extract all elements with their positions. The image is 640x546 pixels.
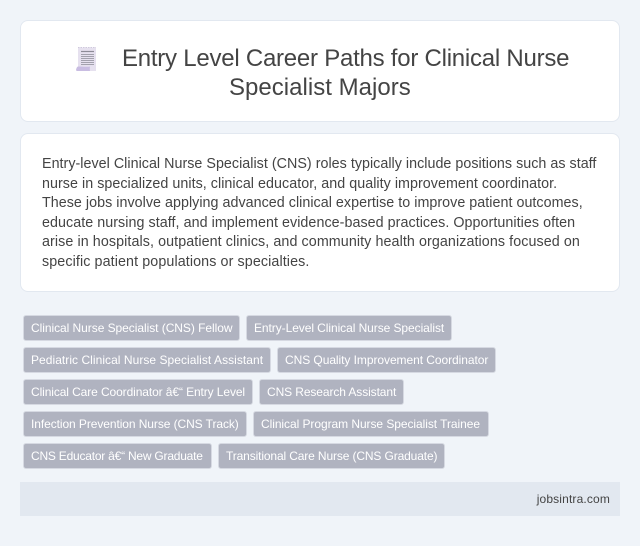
panel: description	[20, 133, 620, 292]
tag	[277, 347, 496, 373]
tag: Clinical Care Coordinator â€“ Entry Level	[31, 385, 245, 399]
description text: arise in hospitals, outpatient clinics, and community health organizations focused on	[42, 234, 580, 250]
tag: Pediatric Clinical Nurse Specialist Assistant	[31, 353, 263, 367]
tag: CNS Research Assistant	[267, 385, 396, 399]
description text: These jobs involve applying advanced clinical expertise to improve patient outcomes,	[42, 195, 583, 211]
title: Entry Level Career Paths for Clinical Nurse	[122, 45, 569, 72]
panel: job title tags	[23, 315, 496, 469]
tag	[23, 315, 240, 341]
footer source text: jobsintra.com	[537, 492, 610, 506]
tag: Clinical Program Nurse Specialist Trainee	[261, 417, 480, 431]
tag	[246, 315, 452, 341]
title: Specialist Majors	[229, 74, 411, 101]
tag: CNS Educator â€“ New Graduate	[31, 449, 203, 463]
description text: Entry-level Clinical Nurse Specialist (CNS) roles typically include positions such as staff	[42, 156, 596, 172]
tag: CNS Quality Improvement Coordinator	[285, 353, 488, 367]
tag	[23, 443, 212, 469]
tag: Infection Prevention Nurse (CNS Track)	[31, 417, 239, 431]
tag: Clinical Nurse Specialist (CNS) Fellow	[31, 321, 232, 335]
title	[122, 45, 569, 101]
footer bar	[20, 482, 620, 516]
tag	[23, 347, 271, 373]
tag: Entry-Level Clinical Nurse Specialist	[254, 321, 444, 335]
description text: nurse in specialized units, clinical educator, and quality improvement coordinator.	[42, 176, 557, 192]
description text: specific patient populations or specialties.	[42, 254, 309, 270]
tag	[23, 379, 253, 405]
description text	[42, 156, 596, 270]
tag: Transitional Care Nurse (CNS Graduate)	[226, 449, 437, 463]
panel: header card	[20, 20, 620, 122]
description text: educate nursing staff, and implement evidence-based practices. Opportunities often	[42, 215, 575, 231]
tag	[23, 411, 247, 437]
tag	[253, 411, 489, 437]
icon: document scroll	[76, 47, 96, 71]
tag	[259, 379, 404, 405]
tag	[218, 443, 445, 469]
